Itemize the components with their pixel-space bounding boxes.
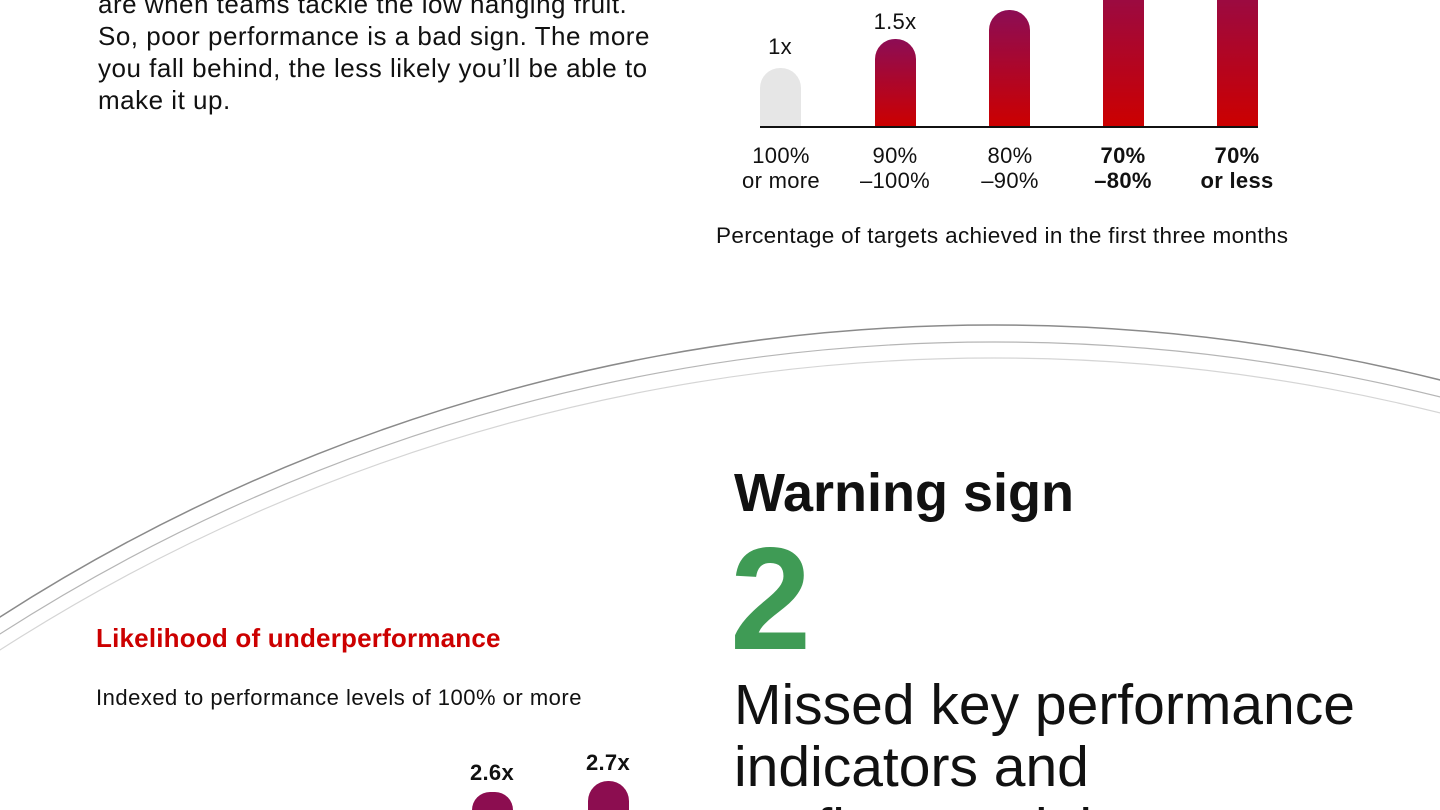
warning description: indicators and	[734, 735, 1089, 799]
big number 2: 2	[730, 517, 811, 680]
axis caption: Percentage of targets achieved in the first three months	[716, 223, 1288, 248]
bar chart: targets achieved: –90%	[981, 168, 1039, 193]
bar chart: targets achieved: –100%	[860, 168, 930, 193]
chart subtitle: Indexed to performance levels of 100% or more	[96, 685, 582, 710]
bottom chart: 2.7x	[586, 750, 630, 775]
bar chart: targets achieved: 70%	[1215, 143, 1259, 168]
bottom chart: 2.6x	[470, 760, 514, 785]
bottom chart	[470, 750, 630, 810]
bar chart: targets achieved: 90%	[873, 143, 917, 168]
bar chart: targets achieved: –80%	[1094, 168, 1152, 193]
intro paragraph	[98, 0, 650, 115]
bars	[760, 68, 801, 126]
bar chart: targets achieved: 70%	[1101, 143, 1145, 168]
intro paragraph: you fall behind, the less likely you’ll be able to	[98, 53, 648, 83]
heading: warning sign: Warning sign	[734, 463, 1074, 523]
bar chart: targets achieved: 1.5x	[874, 9, 916, 34]
bar chart: targets achieved: 80%	[988, 143, 1032, 168]
warning description	[734, 673, 1355, 810]
intro paragraph: So, poor performance is a bad sign. The more	[98, 21, 650, 51]
category labels: or more	[742, 168, 820, 193]
warning description: Missed key performance	[734, 673, 1355, 737]
category labels	[742, 143, 820, 193]
category labels: 100%	[752, 143, 810, 168]
value labels: 1x	[768, 34, 792, 59]
bar chart: targets achieved	[716, 0, 1288, 248]
bar chart: targets achieved: or less	[1200, 168, 1274, 193]
intro paragraph: make it up.	[98, 85, 231, 115]
chart title: Likelihood of underperformance	[96, 623, 501, 653]
axis	[760, 126, 1258, 128]
